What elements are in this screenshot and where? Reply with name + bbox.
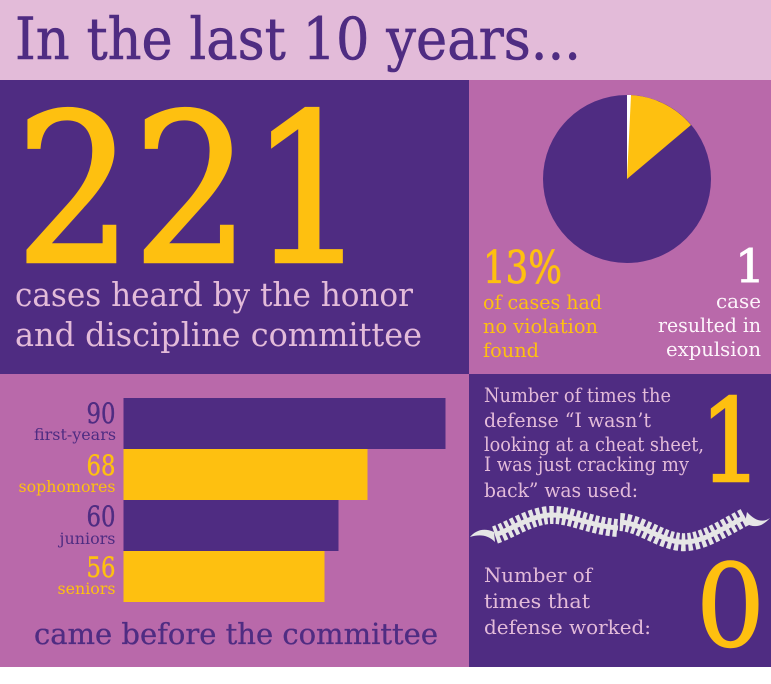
worked text: defense worked: (484, 615, 651, 639)
defense text: defense “I wasn’t (484, 409, 651, 432)
cases text (15, 275, 422, 354)
bar labels: 90 (86, 397, 116, 430)
title: In the last 10 years... (15, 5, 581, 73)
cases text: cases heard by the honor (15, 275, 413, 314)
defense text: looking at a cheat sheet, (484, 433, 704, 456)
panel: pie chart outcomes (469, 80, 771, 374)
big number 221: 221 (16, 70, 368, 310)
chart caption: came before the committee (34, 617, 438, 651)
13% stat: no violation (483, 314, 598, 338)
13% stat: found (483, 338, 539, 362)
defense text: Number of times the (484, 384, 671, 407)
pie chart (543, 95, 711, 263)
panel: cases heard (0, 70, 469, 374)
panel: cracking back defense (469, 374, 771, 673)
bar labels: 68 (86, 449, 116, 482)
1 case stat: 1 (735, 239, 765, 293)
panel: class years bar chart (0, 374, 469, 667)
13% stat (483, 241, 602, 362)
defense text (484, 384, 704, 502)
13% stat: of cases had (483, 290, 602, 314)
bar labels: seniors (58, 580, 116, 598)
13% stat: 13% (483, 241, 562, 294)
bar labels (18, 397, 116, 598)
big number 1: 1 (700, 375, 762, 508)
bar labels: juniors (57, 530, 116, 548)
big number 0: 0 (696, 540, 765, 673)
worked text: times that (484, 589, 590, 613)
worked text (484, 563, 651, 639)
defense text: I was just cracking my (484, 453, 689, 476)
header band (0, 0, 771, 80)
1 case stat: expulsion (666, 337, 761, 361)
1 case stat: resulted in (658, 313, 761, 337)
1 case stat: case (716, 289, 761, 313)
worked text: Number of (484, 563, 594, 587)
bars (124, 398, 446, 602)
defense text: back” was used: (484, 479, 638, 502)
bar labels: 56 (86, 551, 116, 584)
cases text: and discipline committee (15, 315, 422, 354)
icon: spine (470, 512, 770, 542)
bar labels: sophomores (18, 478, 116, 496)
1 case stat (658, 239, 765, 361)
bar labels: first-years (34, 426, 116, 444)
bar labels: 60 (86, 500, 116, 533)
